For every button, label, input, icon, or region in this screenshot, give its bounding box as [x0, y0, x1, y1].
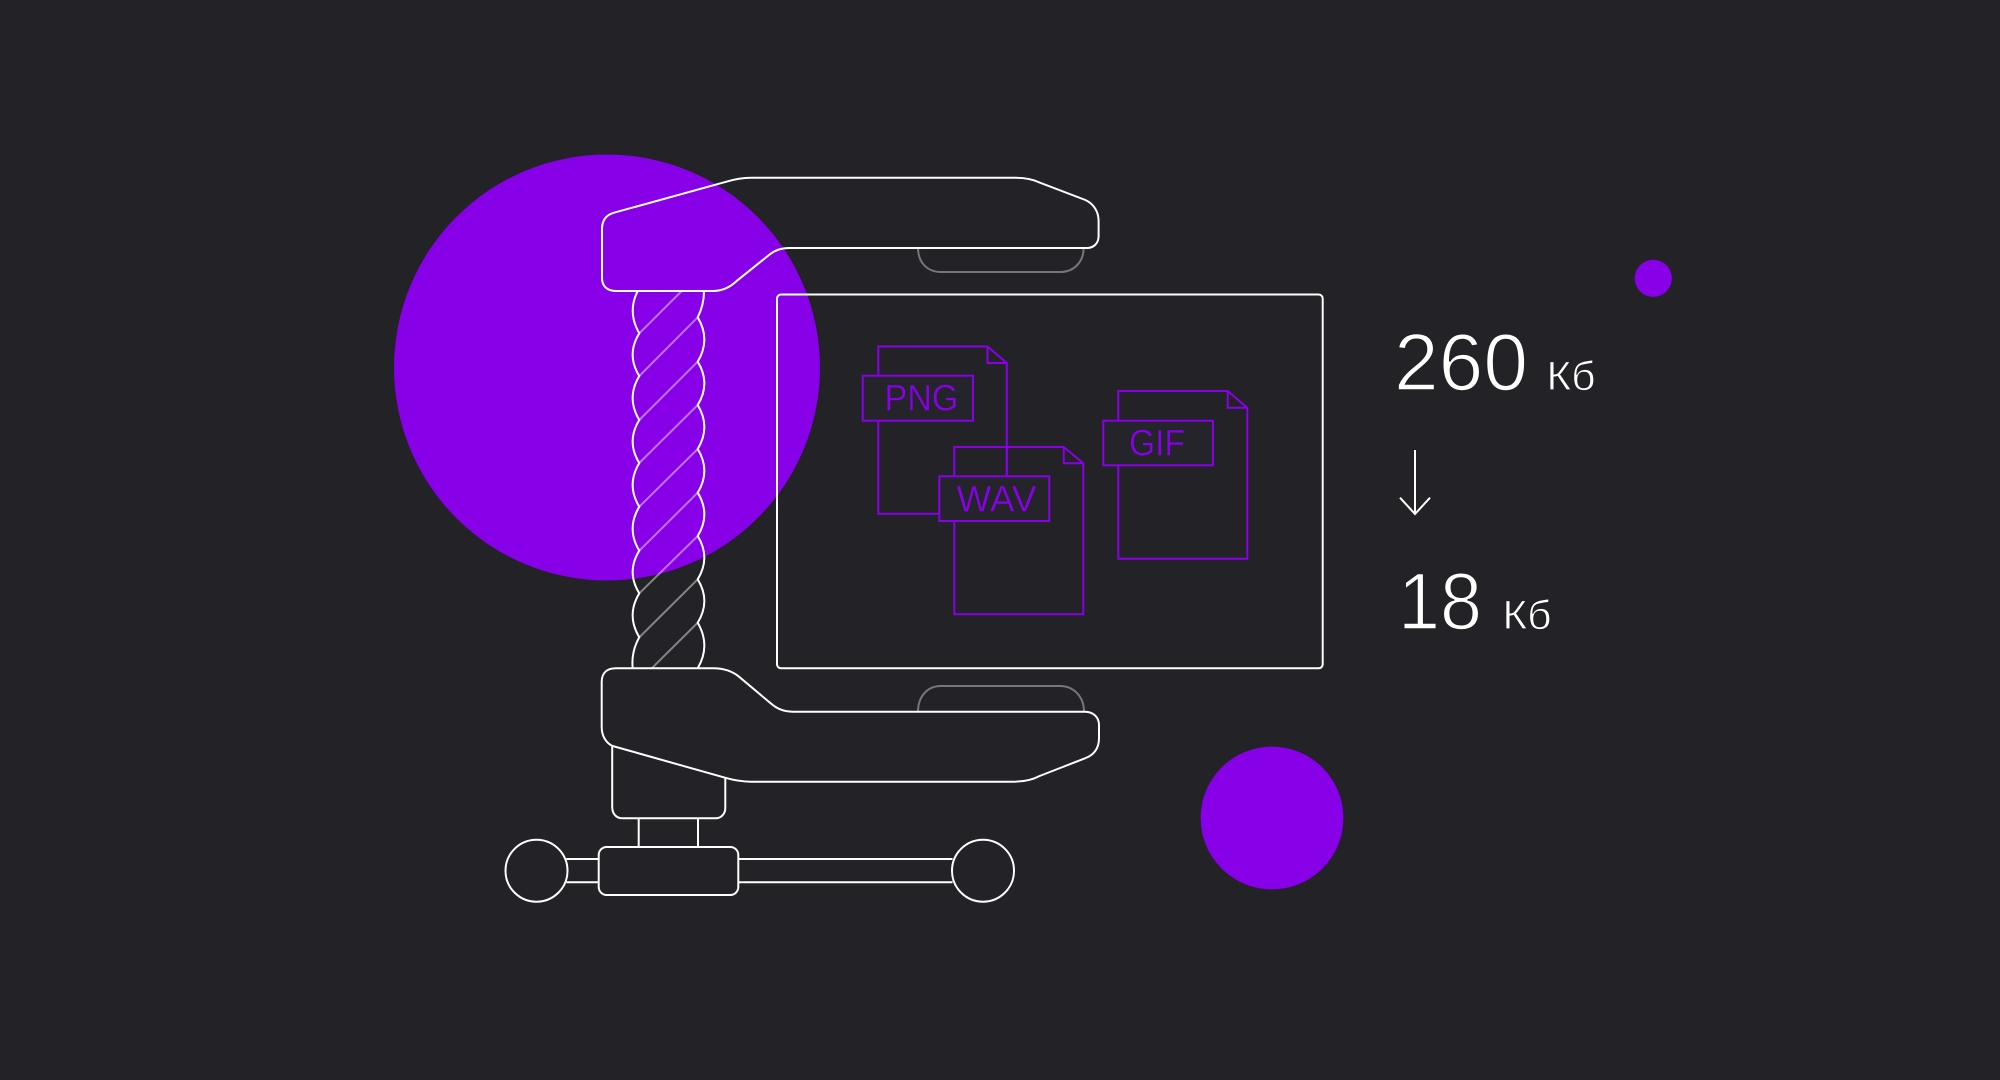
- PNG file: PNG: [884, 378, 958, 419]
- neck stems: [639, 818, 698, 847]
- original size: 260: [1394, 318, 1528, 408]
- PNG file: [863, 346, 1007, 514]
- WAV file: WAV: [956, 479, 1037, 520]
- handle bars: [566, 859, 952, 882]
- threaded screw: [632, 291, 704, 668]
- original size: Кб: [1546, 353, 1596, 399]
- screw collar block: [612, 746, 725, 818]
- small purple dot: [1635, 260, 1672, 297]
- file frame: [777, 294, 1323, 668]
- lower pressure pad: [918, 686, 1084, 712]
- left handle knob: [506, 840, 568, 902]
- compressed size: Кб: [1502, 592, 1552, 638]
- WAV file: [939, 447, 1083, 614]
- compressed size: 18: [1398, 557, 1482, 647]
- original size: [1394, 318, 1596, 408]
- right handle knob: [952, 840, 1014, 902]
- GIF file: GIF: [1129, 423, 1185, 464]
- lower jaw: [602, 668, 1099, 782]
- screw thread diagonals: [639, 291, 698, 668]
- large purple circle: [394, 154, 820, 580]
- upper pressure pad: [918, 248, 1084, 272]
- clamp illustration: [506, 178, 1099, 902]
- screw strand outlines: [632, 291, 704, 668]
- file icons: [863, 346, 1247, 614]
- upper jaw: [602, 178, 1099, 291]
- down arrow: [1400, 450, 1430, 514]
- medium purple circle: [1201, 747, 1343, 889]
- compressed size: [1398, 557, 1552, 647]
- GIF file: [1103, 391, 1247, 559]
- handle hub: [599, 847, 738, 895]
